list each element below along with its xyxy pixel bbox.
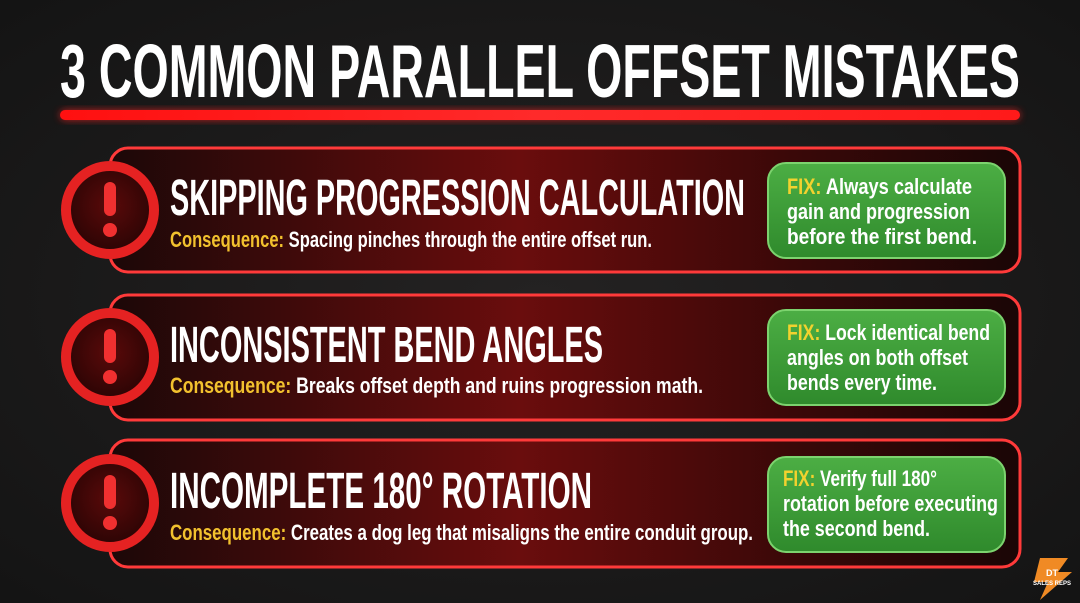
consequence 2: Consequence: Breaks offset depth and ruins progression math. bbox=[170, 373, 703, 398]
fix box 1 bbox=[768, 163, 1005, 258]
heading 2: INCONSISTENT BEND ANGLES bbox=[170, 316, 603, 373]
fix box 1: FIX: Always calculate bbox=[787, 174, 972, 199]
icon: warning 1 bbox=[66, 166, 154, 254]
fix box 2: bends every time. bbox=[787, 370, 937, 395]
title underline bbox=[60, 110, 1020, 120]
icon: warning 3 bbox=[66, 459, 154, 547]
fix box 1: gain and progression bbox=[787, 199, 970, 224]
logo: DT Sales Reps bbox=[1033, 558, 1072, 600]
fix box 2 bbox=[768, 310, 1005, 405]
fix box 1: before the first bend. bbox=[787, 224, 977, 249]
fix box 2: FIX: Lock identical bend bbox=[787, 320, 990, 345]
logo: DT Sales Reps: DT bbox=[1046, 568, 1058, 578]
logo: DT Sales Reps: SALES REPS bbox=[1033, 581, 1071, 587]
consequence 1: Consequence: Spacing pinches through the entire offset run. bbox=[170, 227, 652, 252]
fix box 3: FIX: Verify full 180° bbox=[783, 466, 937, 491]
heading 3: INCOMPLETE 180° ROTATION bbox=[170, 462, 592, 519]
fix box 3: the second bend. bbox=[783, 516, 930, 541]
panel: mistake 3 bbox=[66, 440, 1020, 567]
panel: mistake 2 bbox=[66, 295, 1020, 420]
fix box 2: angles on both offset bbox=[787, 345, 969, 370]
consequence 3: Consequence: Creates a dog leg that misaligns the entire conduit group. bbox=[170, 520, 753, 545]
fix box 3: rotation before executing bbox=[783, 491, 998, 516]
fix box 3 bbox=[768, 457, 1005, 552]
icon: warning 2 bbox=[66, 313, 154, 401]
panel: mistake 1 bbox=[66, 148, 1020, 272]
